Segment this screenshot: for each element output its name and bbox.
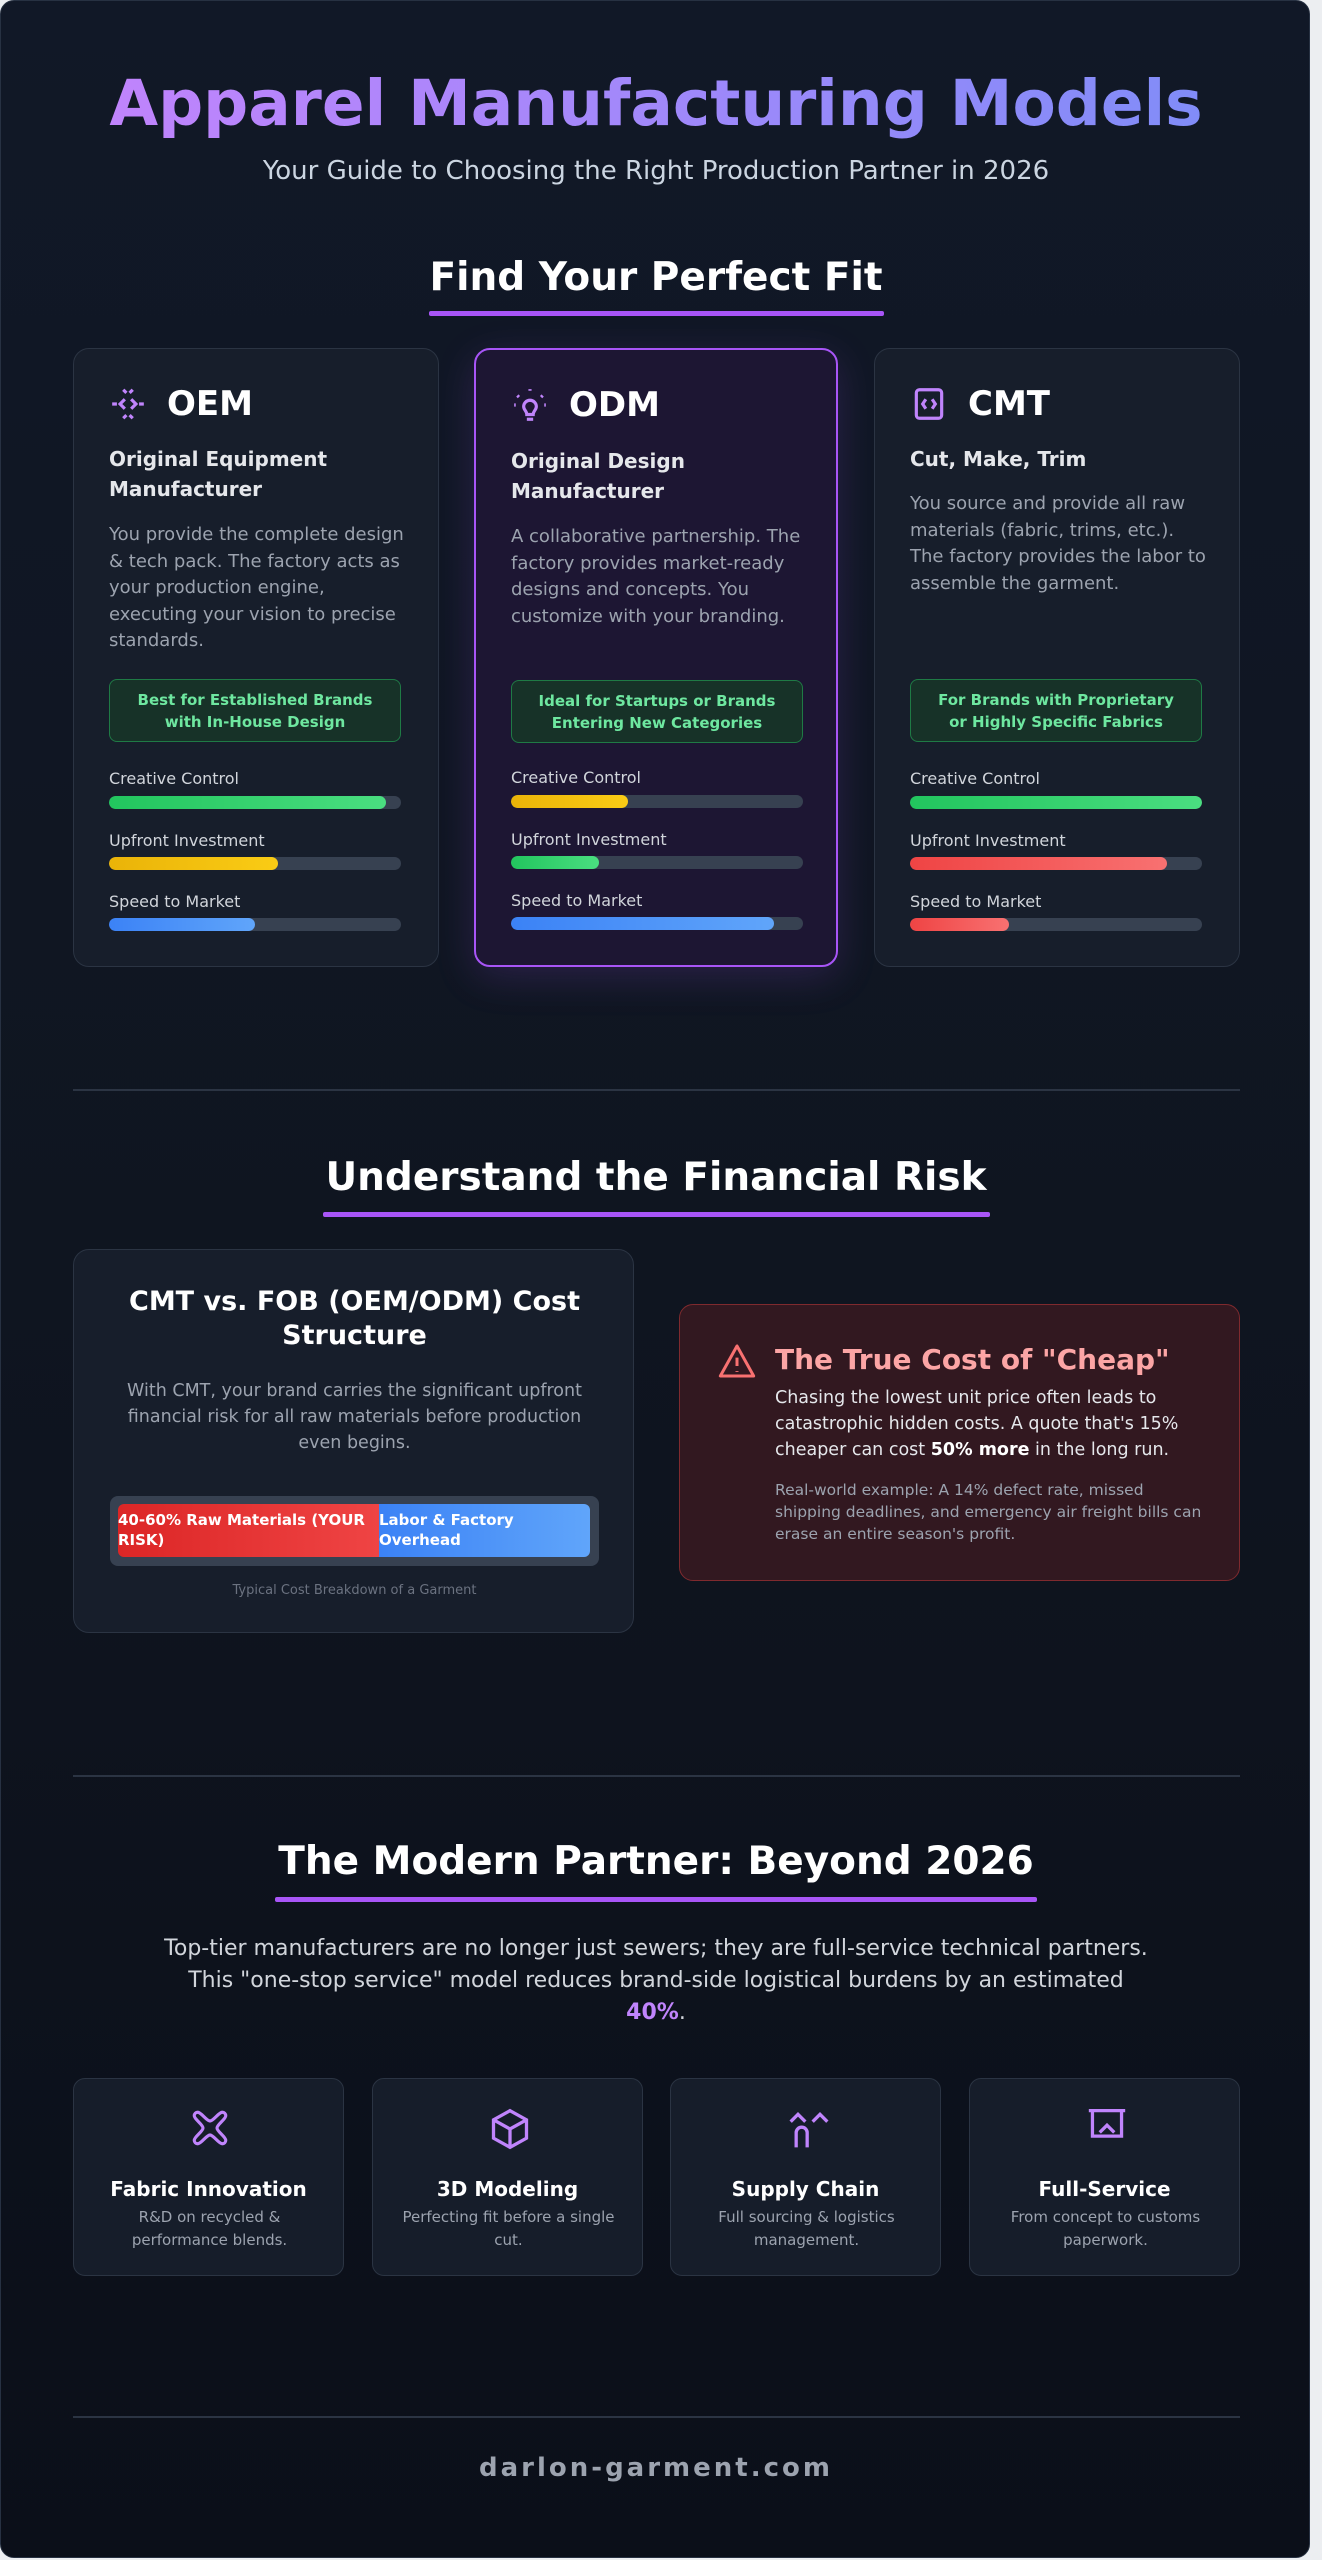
panel: ODM [474,348,838,967]
heading: find your perfect fit: Find Your Perfect Fit [430,255,882,300]
OEM description: You provide the complete design & tech pack. The factory acts as your production engine, executing your vision to precise standards. [109,524,404,651]
heading: modern partner: The Modern Partner: Beyond 2026 [278,1839,1034,1884]
OEM badge: with In-House Design [165,712,345,730]
panel: fabric innovation [73,2078,344,2276]
CMT bars: Speed to Market [910,892,1041,911]
OEM heading [112,384,253,424]
ODM bars: Creative Control [511,768,641,787]
ODM heading [514,385,660,425]
cost structure title: CMT vs. FOB (OEM/ODM) Cost Structure [129,1286,580,1351]
CMT description: You source and provide all raw materials (fabric, trims, etc.). The factory provides the labor to assemble the garment. [910,493,1206,594]
cost structure text: With CMT, your brand carries the significant upfront financial risk for all raw materials before production even begins. [127,1381,582,1453]
panel: full service [969,2078,1240,2276]
icon: cube [492,2108,528,2150]
OEM bars: Speed to Market [109,892,240,911]
CMT badge [910,679,1202,742]
OEM bars [109,769,401,931]
subtitle: Your Guide to Choosing the Right Production Partner in 2026 [263,156,1049,186]
ODM badge [511,680,803,743]
ODM bars: Upfront Investment [511,830,667,849]
panel: 3d modeling [372,2078,643,2276]
ODM subtitle: Original Design Manufacturer [511,449,685,503]
OEM badge [109,679,401,742]
OEM badge: Best for Established Brands [138,690,372,708]
ODM heading: ODM [569,385,660,425]
panel: full service: Full-Service [1038,2177,1171,2201]
ODM bars: Speed to Market [511,891,642,910]
CMT heading: CMT [968,384,1050,424]
CMT badge: For Brands with Proprietary [938,690,1174,708]
icon: full service [1088,2109,1126,2138]
callout example: Real-world example: A 14% defect rate, missed shipping deadlines, and emergency air freight bills can erase an entire season's profit. [775,1481,1201,1543]
icon: fabric [192,2110,228,2146]
CMT subtitle: Cut, Make, Trim [910,447,1086,471]
OEM bars: Upfront Investment [109,831,265,850]
callout: true cost of cheap [679,1304,1240,1581]
callout body: Chasing the lowest unit price often leads to catastrophic hidden costs. A quote that's 15% cheaper can cost 50% more in the long run. [775,1388,1178,1460]
panel: fabric innovation: R&D on recycled & performance blends. [132,2208,287,2249]
CMT heading [914,384,1050,424]
panel: CMT [874,348,1240,967]
footer: darlon-garment.com [479,2453,833,2483]
CMT badge: or Highly Specific Fabrics [949,712,1163,730]
panel: full service: From concept to customs paperwork. [1011,2208,1200,2249]
OEM bars: Creative Control [109,769,239,788]
panel: 3d modeling: 3D Modeling [437,2177,578,2201]
panel: fabric innovation: Fabric Innovation [110,2177,307,2201]
stacked cost bar: 40-60% Raw Materials (YOUR RISK) [118,1511,365,1549]
ODM description: A collaborative partnership. The factory provides market-ready designs and concepts. You customize with your branding. [511,526,800,626]
panel: 3d modeling: Perfecting fit before a single cut. [402,2208,614,2249]
callout title: The True Cost of "Cheap" [775,1343,1170,1376]
ODM badge: Ideal for Startups or Brands [539,692,775,710]
heading: financial risk: Understand the Financial Risk [325,1155,987,1200]
chart caption: Typical Cost Breakdown of a Garment [233,1583,476,1598]
ODM badge: Entering New Categories [552,714,762,732]
CMT bars: Creative Control [910,769,1040,788]
panel: supply chain [670,2078,941,2276]
OEM heading: OEM [167,384,253,424]
icon: supply chain [790,2112,828,2148]
panel: cost structure [73,1249,634,1633]
stacked cost bar [110,1496,599,1566]
icon: warning [718,1344,756,1378]
CMT bars [910,769,1202,931]
stacked cost bar: Labor & Factory Overhead [379,1511,514,1549]
panel: OEM [73,348,439,967]
title: Apparel Manufacturing Models [109,67,1203,140]
CMT bars: Upfront Investment [910,831,1066,850]
intro paragraph: Top-tier manufacturers are no longer just sewers; they are full-service technical partners. This "one-stop service" model reduces brand-side logistical burdens by an estimated 40%. [164,1936,1148,2025]
panel: supply chain: Supply Chain [732,2177,879,2201]
ODM bars [511,768,803,930]
OEM subtitle: Original Equipment Manufacturer [109,447,327,501]
panel: supply chain: Full sourcing & logistics management. [718,2208,895,2249]
